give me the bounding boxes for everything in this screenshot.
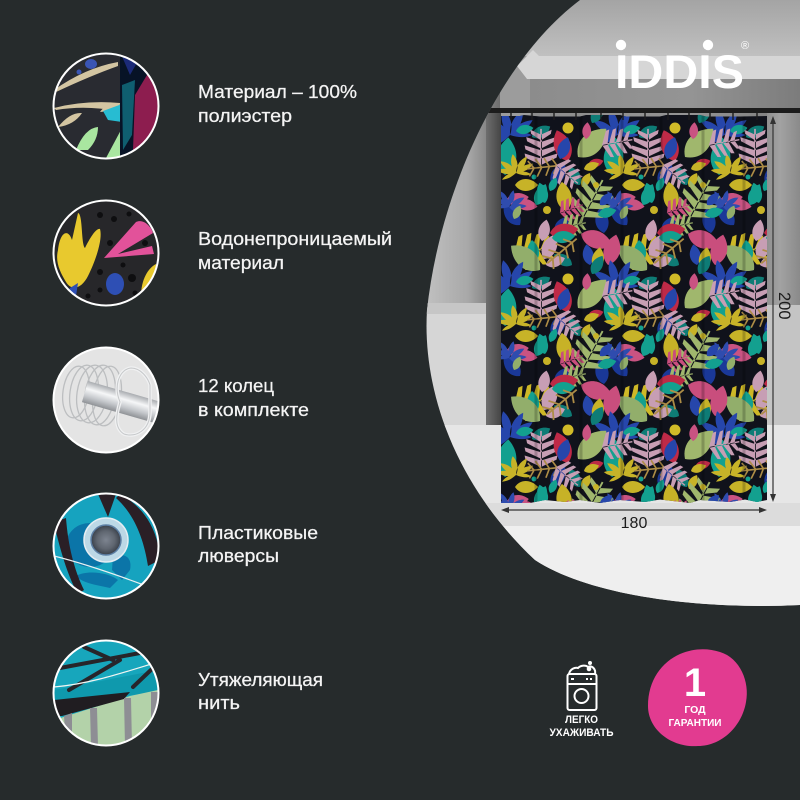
ceiling xyxy=(524,0,800,56)
text: weighted thread: нить xyxy=(198,693,240,713)
text: easy care: ЛЕГКО xyxy=(565,714,598,726)
text: waterproof: Водонепроницаемый xyxy=(198,229,392,249)
photo: fabric close-up xyxy=(54,54,158,158)
text: rings xyxy=(198,376,309,420)
curtain rings xyxy=(511,108,757,120)
back wall xyxy=(530,79,800,116)
icon: washing machine xyxy=(567,662,597,710)
bathroom photo xyxy=(420,0,800,626)
text: waterproof: материал xyxy=(198,253,284,273)
left wall xyxy=(428,93,500,305)
warranty badge xyxy=(648,649,747,746)
warranty badge: ГОД xyxy=(684,704,706,716)
shower curtain xyxy=(501,115,767,503)
logo: IDDIS: ® xyxy=(741,40,749,52)
warranty badge: ГАРАНТИИ xyxy=(668,717,722,729)
text: material xyxy=(198,82,357,126)
photo: rod and rings xyxy=(54,347,165,453)
photo: plastic grommet xyxy=(54,494,160,598)
dimension: height 200 xyxy=(770,116,793,502)
feature: material xyxy=(54,54,357,158)
text: weighted thread: Утяжеляющая xyxy=(198,670,323,690)
right tile wall xyxy=(767,113,800,305)
feature: waterproof xyxy=(54,200,392,306)
text: material: Материал – 100% xyxy=(198,82,357,102)
feature: weighted thread xyxy=(54,640,323,746)
easy care xyxy=(550,662,614,739)
dimension: height 200: 200 xyxy=(775,292,793,320)
wall shadow behind curtain xyxy=(486,113,501,425)
text: grommets: Пластиковые xyxy=(198,523,318,543)
text: weighted thread xyxy=(198,670,323,713)
dimension: width 180: 180 xyxy=(621,515,647,532)
dimension: width 180 xyxy=(501,507,767,532)
left tile wall xyxy=(426,303,486,428)
text: easy care: УХАЖИВАТЬ xyxy=(550,727,614,739)
floor xyxy=(486,503,800,526)
text: easy care xyxy=(550,714,614,739)
text: material: полиэстер xyxy=(198,106,292,126)
feature: grommets xyxy=(54,494,318,598)
bath xyxy=(444,425,800,606)
feature: rings xyxy=(54,347,309,453)
crown moulding xyxy=(517,50,800,79)
curtain rod xyxy=(487,108,800,113)
warranty badge: 1 xyxy=(684,661,706,705)
text: grommets: люверсы xyxy=(198,546,279,566)
leaf print xyxy=(501,115,767,503)
text: grommets xyxy=(198,523,318,566)
logo: IDDIS: IDDIS xyxy=(615,45,744,98)
text: rings: 12 колец xyxy=(198,376,274,396)
text: waterproof xyxy=(198,229,392,273)
text: rings: в комплекте xyxy=(198,400,309,420)
photo: water droplets xyxy=(54,200,160,306)
photo: hem with thread xyxy=(54,640,158,746)
